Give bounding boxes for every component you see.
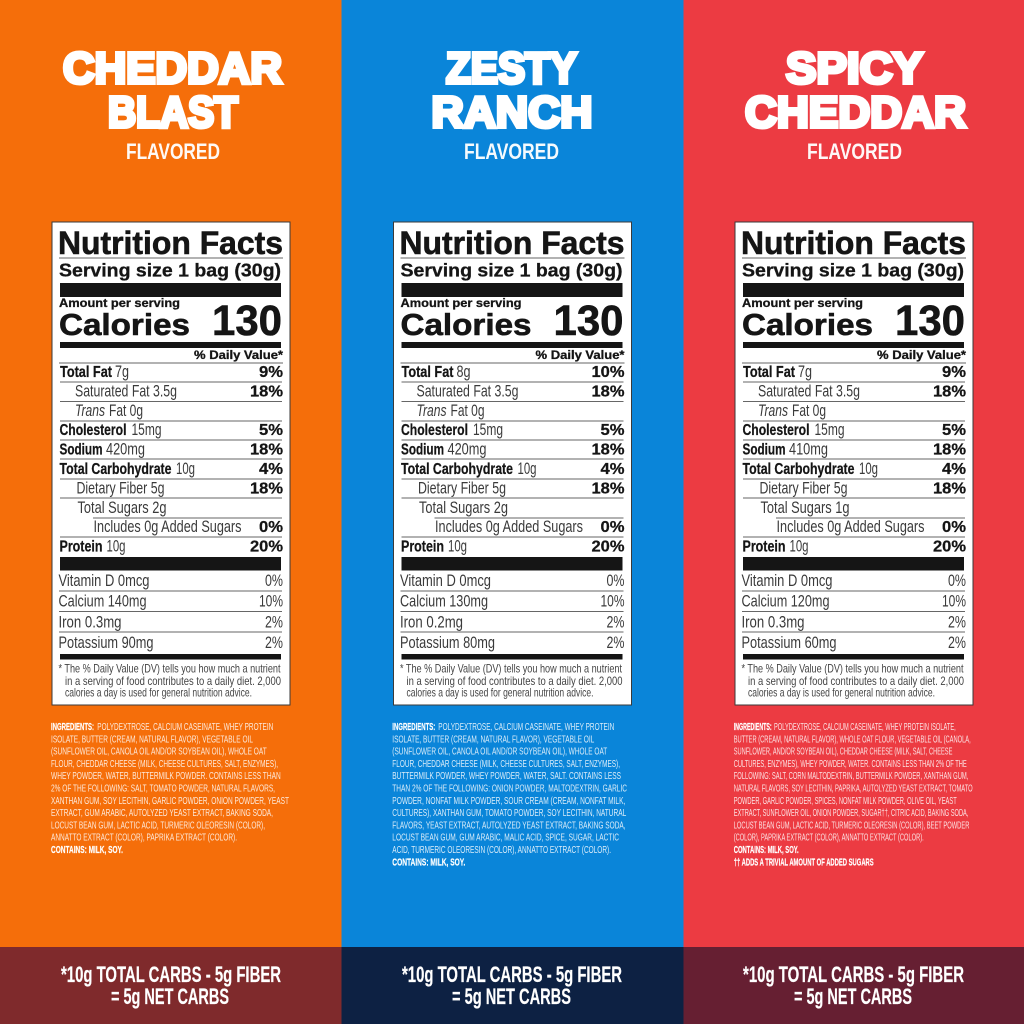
heading: nutrition facts: Nutrition Facts	[58, 225, 283, 261]
calories	[742, 297, 965, 345]
nutrient rows: 9%	[942, 364, 966, 381]
calories	[59, 297, 282, 345]
nutrient rows: 420mg	[448, 440, 486, 458]
nutrient rows: 4%	[942, 461, 966, 478]
vitamins and minerals: Vitamin D 0mcg	[400, 571, 491, 590]
nutrient rows: Total Sugars 1g	[760, 499, 850, 517]
nutrient rows: Saturated Fat 3.5g	[758, 382, 860, 400]
nutrient rows: Includes 0g Added Sugars	[776, 518, 924, 536]
panel: zesty ranch	[342, 0, 684, 1024]
ingredients: zesty ranch: BUTTERMILK POWDER, WHEY POWDER, WATER, SALT. CONTAINS LESS	[392, 771, 621, 782]
ingredients: cheddar blast: INGREDIENTS:	[51, 722, 94, 733]
nutrition facts label	[735, 222, 973, 705]
footnote	[58, 662, 281, 700]
nutrient rows: Includes 0g Added Sugars	[94, 518, 242, 536]
calories: Amount per serving	[742, 298, 863, 310]
footer band: net carbs: = 5g NET CARBS	[794, 984, 912, 1009]
ingredients: cheddar blast: WHEY POWDER, WATER, BUTTERMILK POWDER. CONTAINS LESS THAN	[51, 771, 281, 782]
calories: Calories	[59, 307, 190, 342]
nutrient rows: 10g	[176, 460, 195, 478]
calories: Calories	[400, 307, 532, 342]
nutrient rows: 18%	[250, 442, 283, 458]
vitamins and minerals: 10%	[600, 592, 624, 610]
footnote: calories a day is used for general nutrition advice.	[748, 686, 935, 700]
footer band: net carbs: *10g TOTAL CARBS - 5g FIBER	[61, 962, 281, 987]
nutrient rows: 4%	[600, 461, 624, 478]
nutrient rows: 18%	[592, 384, 624, 400]
nutrient rows: 20%	[933, 538, 966, 556]
calories: Amount per serving	[59, 298, 180, 310]
vitamins and minerals	[58, 571, 283, 652]
nutrient rows: Dietary Fiber 5g	[76, 480, 164, 498]
ingredients: cheddar blast: 2% OF THE FOLLOWING: SALT, TOMATO POWDER, NATURAL FLAVORS,	[51, 784, 275, 794]
ingredients: cheddar blast: CONTAINS: MILK, SOY.	[51, 845, 123, 856]
nutrient rows: Fat 0g	[109, 402, 143, 420]
nutrient rows: Trans	[758, 402, 788, 420]
title: cheddar blast	[63, 44, 282, 137]
ingredients: spicy cheddar	[734, 722, 973, 868]
ingredients: cheddar blast: POLYDEXTROSE, CALCIUM CASEINATE, WHEY PROTEIN	[97, 722, 273, 733]
nutrient rows: Includes 0g Added Sugars	[435, 518, 583, 536]
nutrient rows	[401, 363, 624, 556]
ingredients: cheddar blast: FLOUR, CHEDDAR CHEESE (MILK, CHEESE CULTURES, SALT, ENZYMES),	[51, 759, 278, 770]
ingredients: spicy cheddar: †† ADDS A TRIVIAL AMOUNT OF ADDED SUGARS	[734, 857, 874, 868]
nutrient rows: Dietary Fiber 5g	[760, 480, 848, 498]
ingredients: zesty ranch: FLOUR, CHEDDAR CHEESE (MILK, CHEESE CULTURES, SALT, ENZYMES),	[392, 759, 620, 770]
nutrient rows: 15mg	[814, 421, 844, 439]
nutrient rows: Trans	[416, 402, 446, 420]
vitamins and minerals: 10%	[942, 592, 966, 610]
nutrient rows: Total Sugars 2g	[78, 499, 166, 517]
vitamins and minerals	[400, 571, 624, 652]
ingredients: zesty ranch: POWDER, NONFAT MILK POWDER, SOUR CREAM (CREAM, NONFAT MILK,	[392, 796, 625, 807]
serving size: Serving size 1 bag (30g)	[400, 260, 622, 280]
vitamins and minerals: Potassium 60mg	[742, 633, 836, 652]
ingredients: zesty ranch: CONTAINS: MILK, SOY.	[392, 857, 465, 868]
title: spicy cheddar: CHEDDAR	[745, 88, 966, 137]
calories	[400, 297, 624, 345]
nutrient rows: Total Fat	[743, 364, 796, 381]
serving size: Serving size 1 bag (30g)	[59, 260, 281, 280]
nutrient rows: 18%	[933, 442, 966, 458]
ingredients: spicy cheddar: INGREDIENTS:	[734, 722, 772, 733]
ingredients: zesty ranch: CULTURES), XANTHAN GUM, TOMATO POWDER, SOY LECITHIN, NATURAL	[392, 808, 627, 819]
nutrient rows: Total Carbohydrate	[401, 461, 513, 478]
nutrient rows: Total Fat	[402, 364, 454, 381]
calories: 130	[554, 297, 624, 345]
daily value header: % Daily Value*	[877, 350, 967, 362]
vitamins and minerals: 0%	[948, 571, 966, 590]
footnote: * The % Daily Value (DV) tells you how much a nutrient	[58, 662, 281, 676]
vitamins and minerals: 0%	[265, 571, 283, 590]
footer band: net carbs: = 5g NET CARBS	[452, 984, 571, 1009]
title: cheddar blast: CHEDDAR	[63, 44, 282, 93]
nutrient rows: Sodium	[742, 442, 786, 458]
footer band: net carbs: *10g TOTAL CARBS - 5g FIBER	[402, 962, 622, 987]
footer band: net carbs: = 5g NET CARBS	[111, 984, 229, 1009]
nutrient rows: 10g	[106, 538, 126, 556]
nutrient rows: 10g	[518, 460, 536, 478]
nutrient rows: 9%	[259, 364, 283, 381]
nutrient rows: 18%	[250, 384, 283, 400]
ingredients: zesty ranch	[392, 722, 627, 868]
title: zesty ranch	[432, 44, 592, 137]
nutrient rows: Sodium	[401, 442, 444, 458]
nutrient rows: Cholesterol	[60, 422, 126, 439]
footnote	[400, 662, 623, 700]
footer band: net carbs	[684, 947, 1024, 1024]
nutrient rows	[742, 363, 966, 556]
vitamins and minerals: Vitamin D 0mcg	[742, 571, 832, 590]
nutrient rows: 15mg	[132, 421, 162, 439]
nutrient rows: 18%	[592, 442, 624, 458]
nutrient rows: 5%	[600, 422, 624, 439]
ingredients: spicy cheddar: CONTAINS: MILK, SOY.	[734, 845, 799, 856]
panel: spicy cheddar	[684, 0, 1024, 1024]
calories: 130	[212, 297, 282, 345]
nutrient rows: Cholesterol	[742, 422, 810, 439]
nutrient rows: Protein	[401, 538, 444, 556]
nutrient rows: 5%	[942, 422, 966, 439]
calories: 130	[895, 297, 965, 345]
heading: nutrition facts: Nutrition Facts	[400, 225, 624, 261]
vitamins and minerals: 2%	[265, 633, 283, 652]
ingredients: zesty ranch: (SUNFLOWER OIL, CANOLA OIL AND/OR SOYBEAN OIL), WHOLE OAT	[392, 747, 607, 758]
nutrient rows: Saturated Fat 3.5g	[75, 382, 177, 400]
nutrient rows: Dietary Fiber 5g	[418, 480, 506, 498]
ingredients: cheddar blast: LOCUST BEAN GUM, LACTIC ACID, TURMERIC OLEORESIN (COLOR),	[51, 820, 265, 831]
nutrition facts label	[52, 222, 290, 705]
vitamins and minerals: Iron 0.3mg	[58, 612, 122, 632]
nutrient rows: 20%	[250, 538, 283, 556]
footer band: net carbs	[342, 947, 684, 1024]
vitamins and minerals: 10%	[259, 592, 283, 610]
vitamins and minerals: Calcium 120mg	[742, 592, 830, 610]
nutrient rows: 0%	[600, 519, 624, 536]
nutrient rows: Total Sugars 2g	[419, 499, 508, 517]
heading: nutrition facts: Nutrition Facts	[741, 225, 966, 261]
nutrient rows: 10g	[790, 538, 808, 556]
ingredients: cheddar blast	[51, 722, 289, 856]
nutrient rows: Fat 0g	[450, 402, 484, 420]
ingredients: zesty ranch: POLYDEXTROSE, CALCIUM CASEINATE, WHEY PROTEIN	[438, 722, 614, 733]
nutrient rows: 18%	[933, 384, 966, 400]
ingredients: cheddar blast: (SUNFLOWER OIL, CANOLA OIL AND/OR SOYBEAN OIL), WHOLE OAT	[51, 747, 267, 758]
nutrient rows: 18%	[250, 480, 283, 498]
nutrient rows: 15mg	[473, 421, 503, 439]
nutrient rows: Trans	[75, 402, 105, 420]
footnote: in a serving of food contributes to a daily diet. 2,000	[748, 674, 964, 688]
ingredients: zesty ranch: LOCUST BEAN GUM, GUM ARABIC, MALIC ACID, SPICE, SUGAR, LACTIC	[392, 833, 619, 844]
panel: cheddar blast	[0, 0, 342, 1024]
nutrient rows: Cholesterol	[401, 422, 468, 439]
title: zesty ranch: RANCH	[432, 88, 592, 137]
nutrient rows: 8g	[456, 363, 470, 381]
nutrient rows: 20%	[592, 538, 624, 556]
vitamins and minerals: 2%	[606, 612, 624, 632]
nutrient rows: 410mg	[789, 440, 828, 458]
vitamins and minerals: 2%	[265, 612, 283, 632]
vitamins and minerals: 2%	[948, 612, 966, 632]
vitamins and minerals: Potassium 80mg	[400, 633, 495, 652]
vitamins and minerals: Iron 0.2mg	[400, 612, 463, 632]
footnote: calories a day is used for general nutrition advice.	[406, 686, 594, 700]
nutrient rows: Total Fat	[60, 364, 113, 381]
nutrient rows: Fat 0g	[792, 402, 826, 420]
nutrient rows: 18%	[592, 480, 624, 498]
footnote	[742, 662, 964, 700]
daily value header: % Daily Value*	[536, 350, 625, 362]
vitamins and minerals: 2%	[948, 633, 966, 652]
footnote: in a serving of food contributes to a daily diet. 2,000	[65, 674, 281, 688]
ingredients: zesty ranch: ACID, TURMERIC OLEORESIN (COLOR), ANNATTO EXTRACT (COLOR).	[392, 845, 611, 856]
nutrient rows: 10g	[859, 460, 878, 478]
vitamins and minerals: Potassium 90mg	[58, 633, 154, 652]
nutrient rows: Protein	[60, 538, 102, 556]
nutrient rows: 420mg	[106, 440, 145, 458]
calories: Calories	[742, 307, 873, 342]
ingredients: zesty ranch: ISOLATE, BUTTER (CREAM, NATURAL FLAVOR), VEGETABLE OIL	[392, 734, 595, 745]
vitamins and minerals: Vitamin D 0mcg	[58, 571, 150, 590]
ingredients: zesty ranch: INGREDIENTS:	[392, 722, 435, 733]
nutrient rows: 4%	[259, 461, 283, 478]
subtitle: flavored: FLAVORED	[464, 139, 559, 164]
vitamins and minerals: Calcium 130mg	[400, 592, 488, 610]
ingredients: cheddar blast: ISOLATE, BUTTER (CREAM, NATURAL FLAVOR), VEGETABLE OIL	[51, 734, 253, 745]
title: cheddar blast: BLAST	[108, 88, 238, 137]
nutrient rows: 5%	[259, 422, 283, 439]
nutrient rows: Sodium	[60, 442, 102, 458]
ingredients: cheddar blast: EXTRACT, GUM ARABIC, AUTOLYZED YEAST EXTRACT, BAKING SODA,	[51, 808, 273, 819]
footnote: calories a day is used for general nutrition advice.	[65, 686, 252, 700]
nutrient rows: 10g	[448, 538, 467, 556]
footer band: net carbs	[0, 947, 342, 1024]
vitamins and minerals: Calcium 140mg	[58, 592, 146, 610]
vitamins and minerals	[742, 571, 966, 652]
title: spicy cheddar	[745, 44, 966, 137]
calories: Amount per serving	[400, 298, 522, 310]
nutrition facts label	[394, 222, 632, 705]
subtitle: flavored: FLAVORED	[126, 139, 220, 164]
nutrient rows: Saturated Fat 3.5g	[416, 382, 518, 400]
vitamins and minerals: Iron 0.3mg	[742, 612, 804, 632]
daily value header: % Daily Value*	[194, 350, 284, 362]
nutrient rows: 10%	[592, 364, 624, 381]
nutrient rows: Total Carbohydrate	[60, 461, 172, 478]
vitamins and minerals: 2%	[606, 633, 624, 652]
nutrient rows: 7g	[115, 363, 129, 381]
nutrient rows	[60, 363, 283, 556]
nutrient rows: Protein	[742, 538, 786, 556]
nutrient rows: 7g	[798, 363, 812, 381]
ingredients: zesty ranch: THAN 2% OF THE FOLLOWING: ONION POWDER, MALTODEXTRIN, GARLIC	[392, 784, 627, 794]
subtitle: flavored: FLAVORED	[807, 139, 902, 164]
vitamins and minerals: 0%	[606, 571, 624, 590]
serving size: Serving size 1 bag (30g)	[742, 260, 964, 280]
nutrient rows: Total Carbohydrate	[742, 461, 855, 478]
footnote: * The % Daily Value (DV) tells you how much a nutrient	[400, 662, 623, 676]
ingredients: cheddar blast: ANNATTO EXTRACT (COLOR), PAPRIKA EXTRACT (COLOR).	[51, 833, 237, 844]
nutrient rows: 0%	[259, 519, 283, 536]
ingredients: cheddar blast: XANTHAN GUM, SOY LECITHIN, GARLIC POWDER, ONION POWDER, YEAST	[51, 796, 289, 807]
title: spicy cheddar: SPICY	[786, 44, 923, 93]
nutrient rows: 18%	[933, 480, 966, 498]
footnote: in a serving of food contributes to a daily diet. 2,000	[406, 674, 623, 688]
title: zesty ranch: ZESTY	[446, 44, 577, 93]
nutrient rows: 0%	[942, 519, 966, 536]
ingredients: zesty ranch: FLAVORS, YEAST EXTRACT, AUTOLYZED YEAST EXTRACT, BAKING SODA,	[392, 820, 626, 831]
